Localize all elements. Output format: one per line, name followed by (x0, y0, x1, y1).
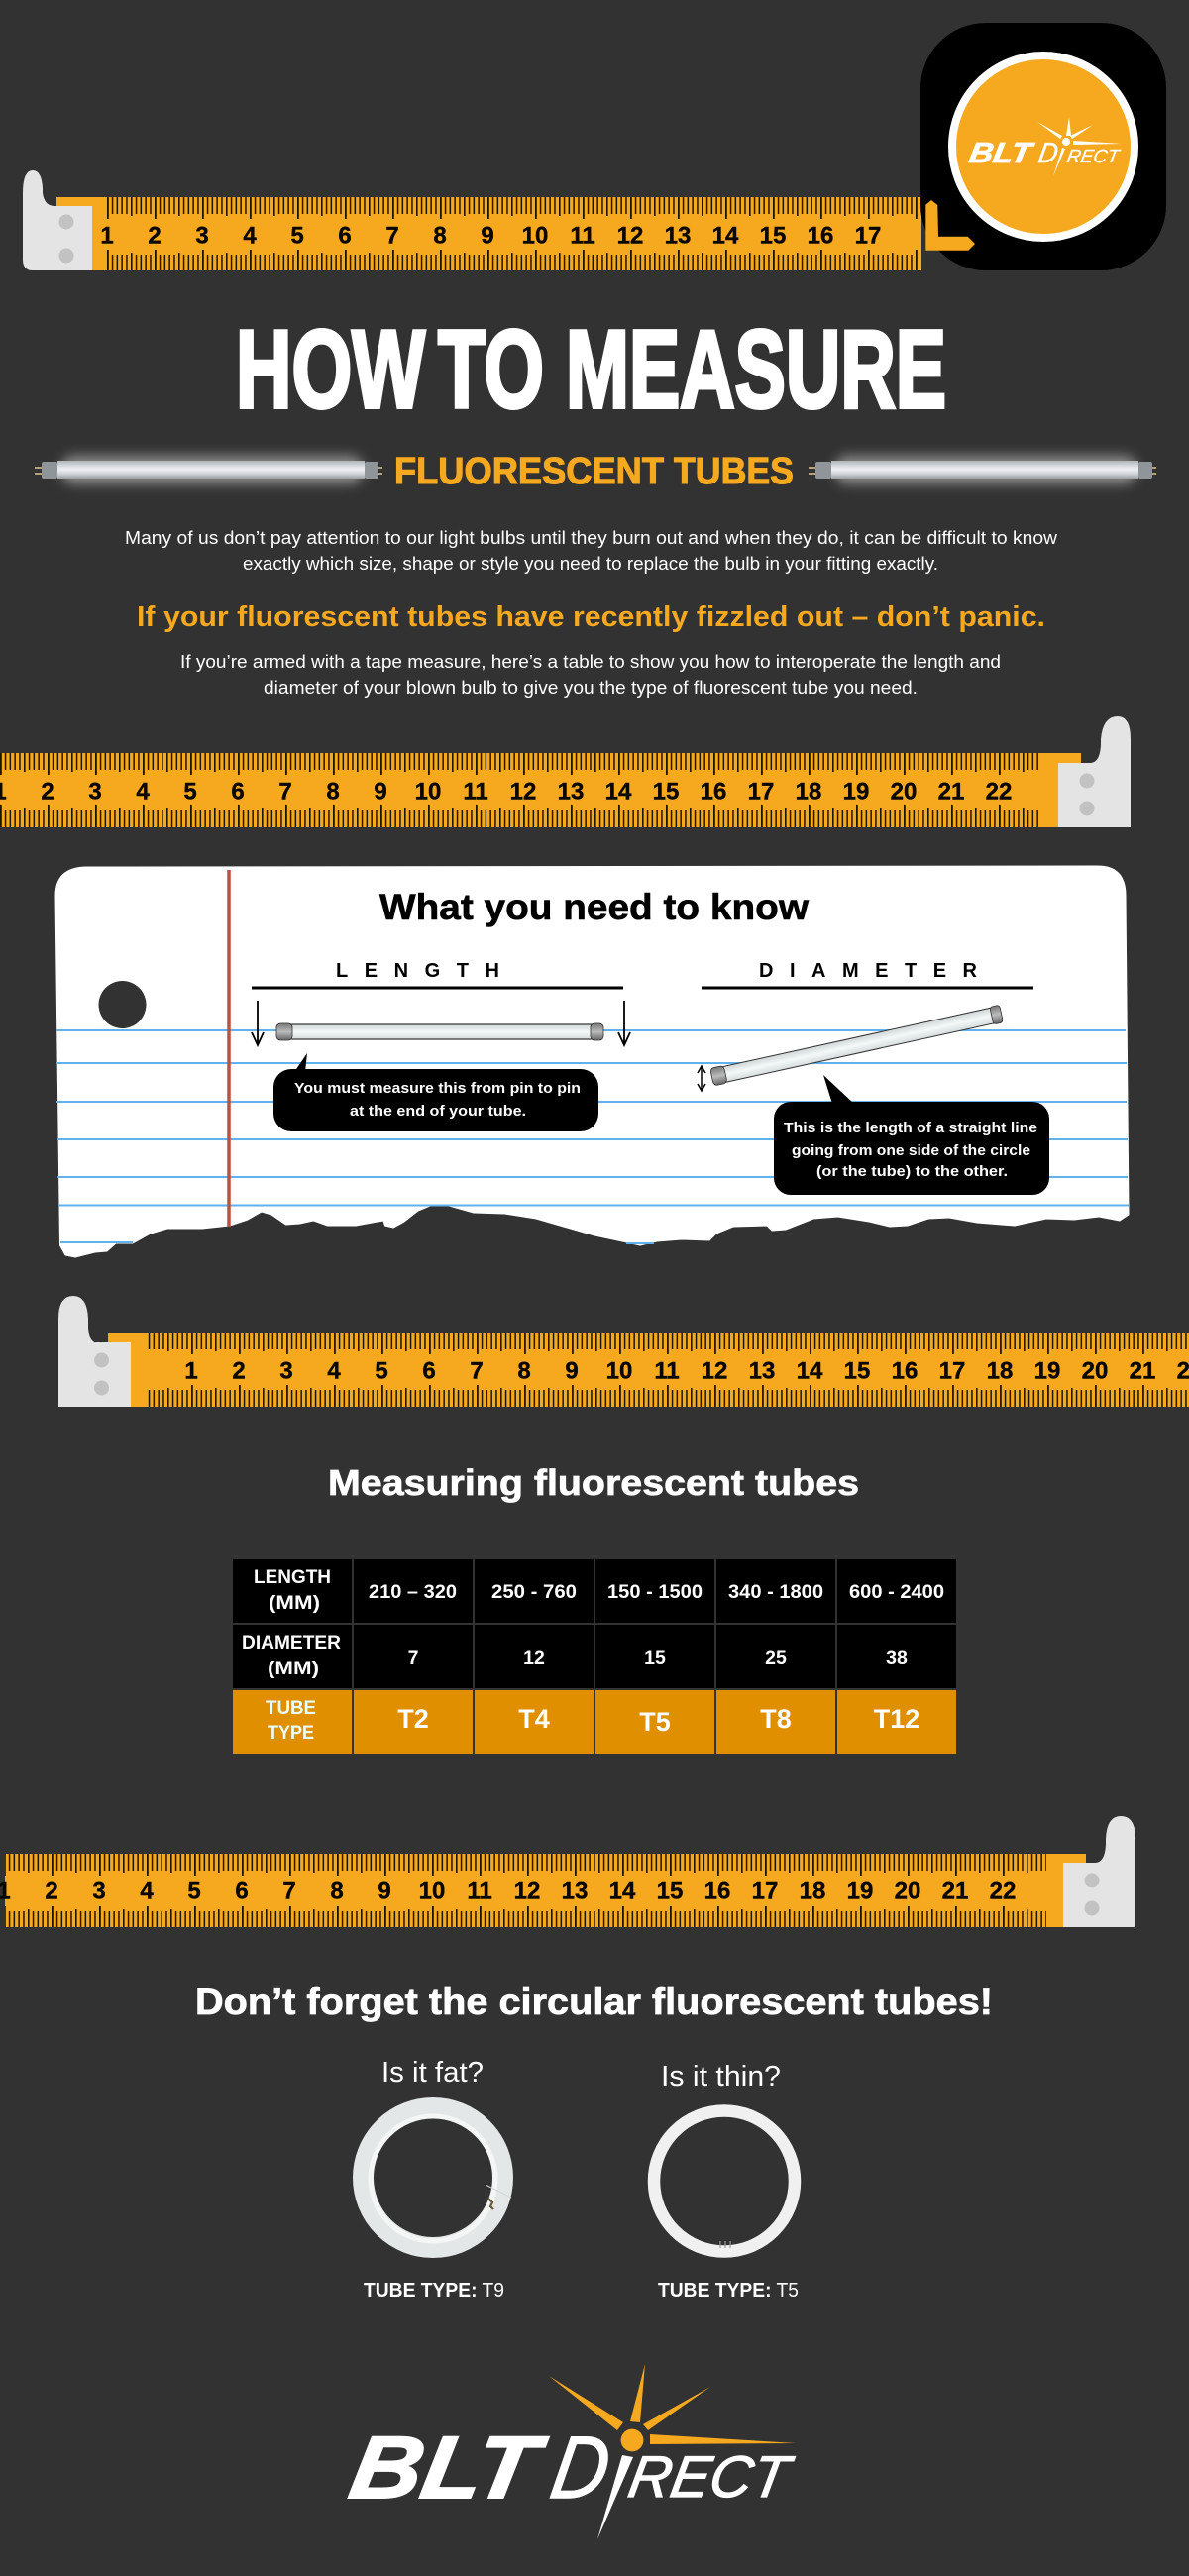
tape numbers 1-22: 16 (704, 1878, 730, 1904)
row: diameter: 12 (523, 1647, 545, 1668)
subtitle: FLUORESCENT (394, 451, 664, 492)
tape numbers 1-17: 5 (290, 222, 304, 250)
tape numbers 1-22: 19 (1034, 1357, 1060, 1385)
heading: measuring fluorescent tubes: Measuring fluorescent tubes (328, 1462, 859, 1503)
footer logo: BLT Direct: D (545, 2419, 617, 2518)
panel: torn notebook paper (55, 866, 1129, 1257)
tape numbers 1-17: 12 (617, 222, 643, 250)
tape numbers 1-22: 12 (514, 1878, 540, 1904)
row: tube type: TUBE (266, 1697, 316, 1719)
tape measure 2 (0, 716, 1131, 827)
tape numbers 1-22: 19 (847, 1878, 873, 1904)
tape numbers 1-22: 15 (657, 1878, 683, 1904)
tape numbers 1-22: 10 (606, 1357, 632, 1385)
tape numbers 1-17: 2 (148, 222, 162, 250)
tape numbers 1-22: 12 (510, 779, 536, 805)
tape numbers 1-22: 17 (748, 779, 774, 805)
sun burst (549, 2364, 796, 2539)
tape numbers 1-22: 20 (1082, 1357, 1108, 1385)
tape numbers 1-17: 14 (712, 222, 739, 250)
tape numbers 1-22 (184, 1357, 1189, 1385)
tape numbers 1-17: 4 (243, 222, 257, 250)
row: length: 250 - 760 (491, 1581, 577, 1603)
tape numbers 1-22: 9 (374, 779, 387, 805)
row: length (233, 1559, 956, 1623)
tape numbers 1-22: 10 (419, 1878, 445, 1904)
tape numbers 1-22: 11 (463, 779, 488, 805)
tape numbers 1-22: 17 (939, 1357, 965, 1385)
tape numbers 1-22: 4 (140, 1878, 154, 1904)
intro paragraph (125, 528, 1058, 574)
title (236, 308, 946, 431)
panel heading: What you need to know (379, 887, 809, 927)
tape numbers 1-22: 19 (843, 779, 869, 805)
tape numbers 1-17: 7 (385, 222, 399, 250)
tape numbers 1-22: 4 (136, 779, 150, 805)
table: tube sizes (233, 1559, 956, 1754)
subtitle: TUBES (674, 451, 794, 492)
title: MEASURE (566, 308, 946, 431)
row: diameter: 15 (644, 1647, 666, 1668)
tape end clip (1063, 1816, 1135, 1927)
notebook blue rules (56, 1030, 1129, 1243)
tape numbers 1-22: 2 (41, 779, 54, 805)
arrow: right (618, 1001, 630, 1045)
intro paragraph: exactly which size, shape or style you need to replace the bulb in your fitting exactly. (243, 554, 938, 574)
tape numbers 1-22: 6 (235, 1878, 249, 1904)
tape numbers 1-22: 8 (330, 1878, 344, 1904)
label: is it fat: Is it fat? (381, 2057, 484, 2089)
tape numbers 1-22: 18 (800, 1878, 825, 1904)
tape numbers 1-22: 11 (467, 1878, 492, 1904)
tape numbers 1-22: 21 (938, 779, 964, 805)
tape numbers 1-17: 15 (760, 222, 786, 250)
icon: straight tube (276, 1023, 603, 1040)
title: TO (438, 308, 544, 431)
tape measure 1 with case (23, 23, 1166, 270)
arrow: left (252, 1001, 264, 1045)
heading: circular tubes: Don’t forget the circular fluorescent tubes! (195, 1982, 993, 2022)
tape numbers 1-17: 16 (808, 222, 833, 250)
title: HOW (236, 308, 425, 431)
tape numbers 1-22: 13 (562, 1878, 588, 1904)
callout: straight line definition: going from one side of the circle (792, 1142, 1030, 1159)
tape numbers 1-17: 17 (855, 222, 881, 250)
footer logo: BLT Direct (344, 2364, 798, 2539)
row: tube type (233, 1690, 956, 1754)
tape numbers 1-22: 10 (415, 779, 441, 805)
tape numbers 1-22: 9 (565, 1357, 579, 1385)
tape numbers 1-22: 15 (844, 1357, 870, 1385)
tape numbers 1-22: 14 (609, 1878, 636, 1904)
callout: straight line definition (774, 1075, 1049, 1195)
tape numbers 1-17: 3 (195, 222, 209, 250)
tape numbers 1-22: 21 (942, 1878, 968, 1904)
tape numbers 1-22: 13 (749, 1357, 775, 1385)
row: length: 340 - 1800 (728, 1581, 823, 1603)
tape numbers 1-22: 17 (752, 1878, 778, 1904)
tape numbers 1-22: 7 (282, 1878, 296, 1904)
tape numbers 1-17: 13 (665, 222, 691, 250)
row: diameter: DIAMETER (242, 1632, 341, 1654)
length column (252, 960, 630, 1131)
tape end clip (23, 170, 92, 270)
tape measure 3 (58, 1296, 1189, 1407)
tape hook (925, 200, 975, 251)
case badge with logo (952, 55, 1135, 238)
tape numbers 1-17: 11 (570, 222, 595, 250)
arrow: diameter double (698, 1066, 705, 1091)
tape numbers 1-22: 9 (378, 1878, 391, 1904)
label: tube type T9: TUBE TYPE: T9 (364, 2280, 504, 2302)
red margin line (227, 870, 231, 1227)
orange callout sentence: If your fluorescent tubes have recently fizzled out – don’t panic. (137, 601, 1045, 633)
tape numbers 1-22: 2 (45, 1878, 58, 1904)
row: length: 150 - 1500 (607, 1581, 703, 1603)
tape numbers 1-22: 15 (653, 779, 679, 805)
tape numbers 1-17: 1 (100, 222, 114, 250)
punched hole (99, 981, 147, 1028)
diameter column: DIAMETER (759, 960, 978, 982)
label: tube type T5: TUBE TYPE: T5 (658, 2280, 799, 2302)
row: length: 210 – 320 (369, 1581, 457, 1603)
tape numbers 1-22: 1 (184, 1357, 198, 1385)
tape numbers 1-22: 5 (375, 1357, 388, 1385)
icon: thin circular tube (654, 2110, 795, 2251)
row: diameter: 7 (408, 1647, 418, 1668)
tape numbers 1-22: 21 (1130, 1357, 1155, 1385)
tape numbers 1-22: 5 (187, 1878, 201, 1904)
tape numbers 1-22: 8 (326, 779, 340, 805)
tape numbers 1-22 (0, 779, 1012, 805)
row: diameter: 38 (886, 1647, 908, 1668)
tape numbers 1-22: 22 (990, 1878, 1016, 1904)
row: tube type: T8 (760, 1704, 792, 1734)
tape numbers 1-22 (0, 1878, 1016, 1904)
footer logo: BLT Direct: BLT (344, 2419, 553, 2518)
second paragraph (180, 652, 1001, 698)
tape numbers 1-22: 2 (232, 1357, 246, 1385)
row: diameter: 25 (765, 1647, 787, 1668)
row: tube type: T4 (518, 1704, 550, 1734)
row: tube type: TYPE (268, 1722, 314, 1744)
label: is it thin: Is it thin? (661, 2061, 781, 2093)
icon: angled tube (710, 1005, 1003, 1086)
tape numbers 1-22: 6 (422, 1357, 436, 1385)
case badge with logo: D (1036, 138, 1060, 169)
tape blade (56, 197, 921, 270)
tape measure 4 (0, 1816, 1135, 1927)
tape numbers 1-22: 13 (558, 779, 584, 805)
tape numbers 1-17 (100, 222, 881, 250)
tape numbers 1-22: 6 (231, 779, 245, 805)
tape numbers 1-22: 20 (895, 1878, 920, 1904)
row: tube type: T2 (397, 1704, 429, 1734)
row: tube type: T5 (639, 1707, 671, 1737)
icon: fat circular tube (363, 2108, 511, 2247)
tape numbers 1-22: 7 (470, 1357, 484, 1385)
length column: LENGTH (336, 960, 499, 982)
tape numbers 1-22: 12 (702, 1357, 727, 1385)
tape numbers 1-22: 20 (891, 779, 917, 805)
tape numbers 1-22: 18 (796, 779, 821, 805)
tape numbers 1-22: 11 (654, 1357, 680, 1385)
tape numbers 1-22: 3 (88, 779, 102, 805)
row: length: (MM) (269, 1592, 320, 1614)
tape numbers 1-22: 16 (701, 779, 726, 805)
icon: right fluorescent tube (809, 456, 1156, 483)
tape numbers 1-22: 14 (797, 1357, 823, 1385)
case badge with logo: BLT (967, 138, 1036, 169)
second paragraph: If you’re armed with a tape measure, here’s a table to show you how to interoperate the length and (180, 652, 1001, 672)
tape numbers 1-17: 8 (433, 222, 447, 250)
tape end clip (58, 1296, 131, 1407)
callout: straight line definition: (or the tube) to the other. (816, 1163, 1008, 1180)
callout: pin to pin: at the end of your tube. (350, 1103, 526, 1120)
tape numbers 1-22: 7 (278, 779, 292, 805)
tape numbers 1-22: 14 (605, 779, 632, 805)
tape numbers 1-17: 6 (338, 222, 352, 250)
tape numbers 1-17: 10 (522, 222, 548, 250)
tape numbers 1-22: 18 (987, 1357, 1013, 1385)
tape numbers 1-22: 4 (327, 1357, 341, 1385)
row: length: 600 - 2400 (849, 1581, 944, 1603)
second paragraph: diameter of your blown bulb to give you the type of fluorescent tube you need. (264, 678, 918, 698)
tape case (920, 23, 1166, 270)
icon: left fluorescent tube (35, 456, 382, 483)
diameter column (698, 960, 1049, 1195)
tape numbers 1-22: 3 (92, 1878, 106, 1904)
tape numbers 1-22: 22 (986, 779, 1012, 805)
case badge with logo: RECT (1065, 147, 1122, 167)
callout: pin to pin (273, 1053, 598, 1131)
row: length: LENGTH (254, 1566, 331, 1588)
row: tube type: T12 (874, 1704, 919, 1734)
row: diameter: (MM) (268, 1658, 319, 1679)
intro paragraph: Many of us don’t pay attention to our light bulbs until they burn out and when they do, it can be difficult to know (125, 528, 1058, 548)
tape numbers 1-22: 8 (517, 1357, 531, 1385)
tape end clip (1058, 716, 1131, 827)
callout: pin to pin: You must measure this from pin to pin (294, 1080, 581, 1097)
footer logo: BLT Direct: RECT (624, 2443, 798, 2510)
tape numbers 1-22: 16 (892, 1357, 918, 1385)
tape numbers 1-22: 3 (279, 1357, 293, 1385)
row: diameter (233, 1625, 956, 1688)
tape numbers 1-22: 5 (183, 779, 197, 805)
tape numbers 1-17: 9 (481, 222, 494, 250)
callout: straight line definition: This is the length of a straight line (784, 1120, 1037, 1136)
